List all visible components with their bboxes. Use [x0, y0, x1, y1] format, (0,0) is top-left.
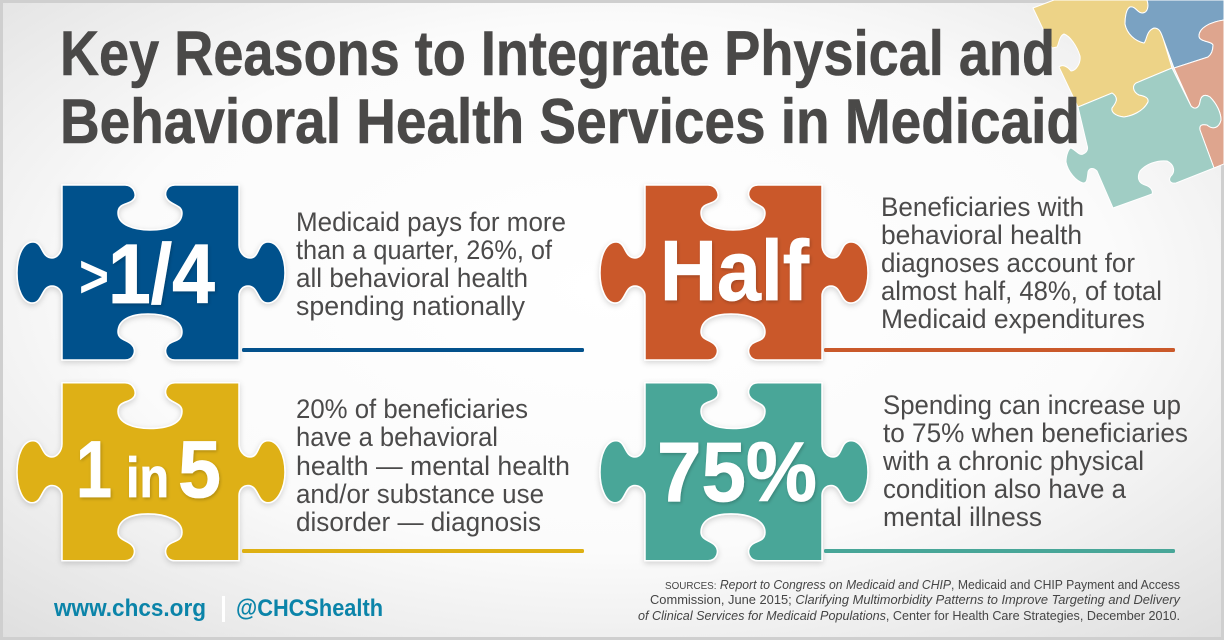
puzzle piece: 75%: 75%	[657, 425, 817, 519]
text: one in five	[296, 394, 570, 537]
puzzle piece: Half	[600, 185, 868, 360]
puzzle piece: 75%	[600, 383, 868, 561]
text: quarter of spending: spending nationally	[296, 291, 525, 321]
puzzle piece: >1/4: 1/4	[108, 227, 215, 321]
sources: SOURCES: Report to Congress on Medicaid and CHIP, Medicaid and CHIP Payment and Access	[665, 577, 1180, 592]
text: half of expenditures: Medicaid expenditures	[881, 304, 1145, 334]
sources: of Clinical Services for Medicaid Populations, Center for Health Care Strategies, December 2010.	[638, 608, 1180, 623]
text: spending increase: mental illness	[883, 502, 1042, 532]
text: quarter of spending: all behavioral health	[296, 263, 528, 293]
website and handle: @CHCShealth	[236, 595, 383, 622]
text: spending increase: Spending can increase up	[883, 390, 1181, 420]
puzzle piece: >1/4: >	[79, 243, 109, 310]
text: quarter of spending	[296, 207, 566, 321]
website and handle: www.chcs.org	[53, 595, 206, 622]
icon: corner puzzle	[1033, 0, 1224, 208]
text: spending increase: to 75% when beneficiaries	[883, 418, 1188, 448]
text: quarter of spending: than a quarter, 26%, of	[296, 235, 552, 265]
text: spending increase	[882, 390, 1188, 532]
text: one in five: health — mental health	[296, 451, 570, 481]
text: half of expenditures	[881, 192, 1162, 334]
puzzle piece: Half: Half	[660, 224, 810, 319]
puzzle piece: >1/4	[17, 185, 285, 360]
website and handle	[53, 595, 383, 622]
text: spending increase: condition also have a	[883, 474, 1127, 504]
text: half of expenditures: diagnoses account for	[881, 248, 1135, 278]
text: half of expenditures: behavioral health	[881, 220, 1082, 250]
title: Key Reasons to Integrate Physical and	[60, 19, 1055, 89]
text: spending increase: with a chronic physical	[882, 446, 1144, 476]
text: one in five: and/or substance use	[296, 479, 544, 509]
puzzle piece: 1 in 5: 1	[76, 425, 112, 515]
puzzle piece: 1 in 5	[17, 383, 285, 561]
sources: Commission, June 2015; Clarifying Multimorbidity Patterns to Improve Targeting and Delivery	[650, 592, 1181, 607]
text: half of expenditures: Beneficiaries with	[881, 192, 1084, 222]
title: Behavioral Health Services in Medicaid	[60, 87, 1080, 157]
text: one in five: disorder — diagnosis	[296, 507, 541, 537]
text: quarter of spending: Medicaid pays for more	[296, 207, 566, 237]
sources	[638, 577, 1181, 623]
puzzle piece: 1 in 5: in	[126, 446, 169, 510]
title	[60, 19, 1080, 157]
text: one in five: 20% of beneficiaries	[296, 394, 528, 424]
puzzle piece: 1 in 5: 5	[178, 425, 221, 515]
text: half of expenditures: almost half, 48%, of total	[881, 276, 1162, 306]
text: one in five: have a behavioral	[296, 422, 498, 452]
